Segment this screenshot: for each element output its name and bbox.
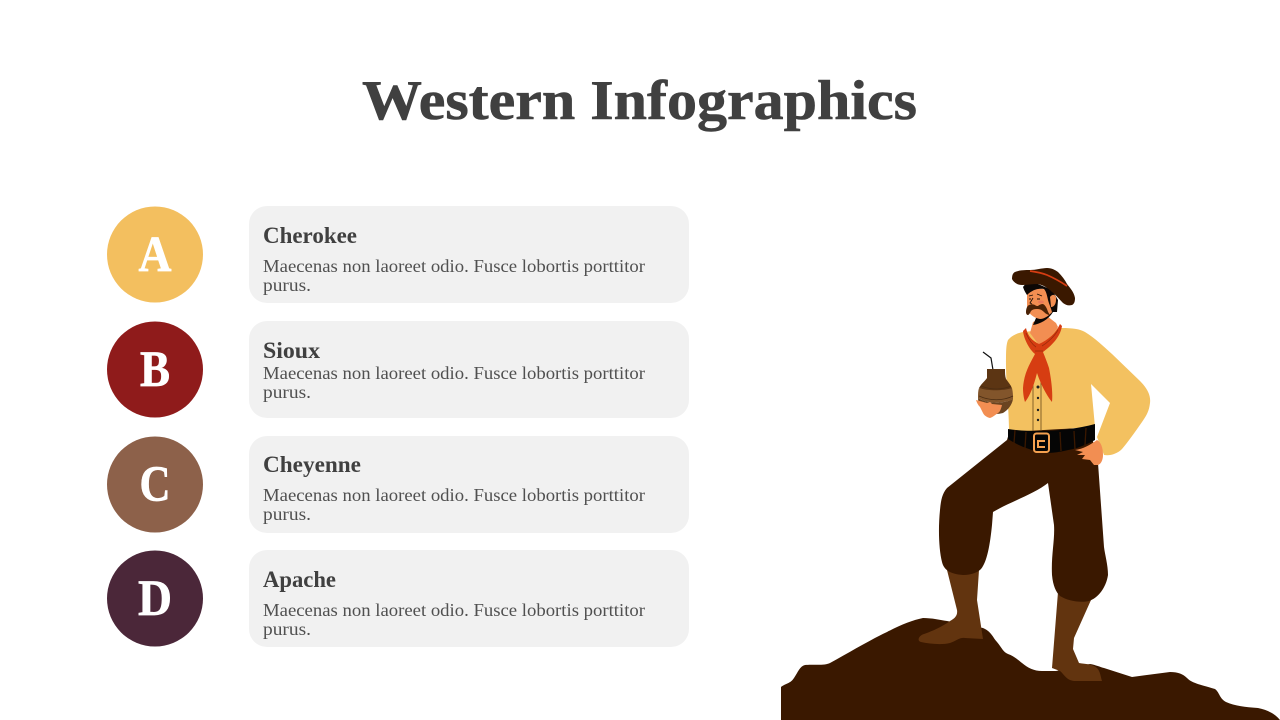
card: Cherokee: Cherokee bbox=[263, 223, 357, 248]
belt bbox=[1008, 424, 1095, 453]
badge: C bbox=[107, 436, 203, 532]
badge: A bbox=[107, 206, 203, 302]
card: Apache bbox=[249, 550, 689, 647]
card: Cheyenne: Cheyenne bbox=[263, 452, 361, 477]
ear bbox=[1050, 295, 1056, 307]
card: Cheyenne: Maecenas non laoreet odio. Fusce lobortis porttitor bbox=[263, 485, 645, 505]
row: Cheyenne bbox=[107, 436, 689, 533]
hat bbox=[1012, 268, 1075, 305]
card: Sioux bbox=[249, 321, 689, 418]
row: Apache bbox=[107, 550, 689, 647]
card: Sioux: purus. bbox=[263, 382, 311, 402]
facial features bbox=[1029, 294, 1042, 304]
card: Cherokee: Maecenas non laoreet odio. Fusce lobortis porttitor bbox=[263, 256, 645, 276]
title: Western Infographics bbox=[362, 70, 917, 132]
cheek blush bbox=[1038, 300, 1044, 304]
badge: D bbox=[107, 550, 203, 646]
card: Sioux: Maecenas non laoreet odio. Fusce lobortis porttitor bbox=[263, 363, 645, 383]
hair bbox=[1023, 281, 1058, 312]
card: Cheyenne bbox=[249, 436, 689, 533]
badge: D: D bbox=[138, 571, 172, 627]
neck and chest bbox=[1030, 316, 1058, 345]
row: Cherokee bbox=[107, 206, 689, 303]
card: Sioux: Sioux bbox=[263, 338, 321, 363]
shirt placket and buttons bbox=[1033, 368, 1041, 432]
badge: C: C bbox=[140, 457, 170, 513]
badge: A: A bbox=[138, 227, 172, 283]
shirt bbox=[1006, 328, 1150, 455]
card: Cherokee bbox=[249, 206, 689, 303]
red neckerchief bbox=[1023, 324, 1062, 402]
moustache bbox=[1026, 304, 1050, 315]
left boot bbox=[919, 570, 983, 644]
trousers bbox=[939, 428, 1108, 602]
card: Apache: purus. bbox=[263, 619, 311, 639]
neck shadow bbox=[1033, 312, 1053, 325]
mate gourd with straw bbox=[978, 352, 1013, 414]
badge: B bbox=[107, 322, 203, 418]
badge: B: B bbox=[140, 342, 170, 398]
face bbox=[1027, 289, 1053, 319]
left hand holding gourd bbox=[976, 400, 1002, 418]
right hand on hip bbox=[1075, 440, 1103, 465]
illustration: cowboy on a rock bbox=[781, 268, 1280, 720]
card: Cheyenne: purus. bbox=[263, 504, 311, 524]
right boot bbox=[1052, 592, 1102, 681]
card: Apache: Maecenas non laoreet odio. Fusce lobortis porttitor bbox=[263, 600, 645, 620]
rock ground bbox=[781, 618, 1280, 720]
card: Cherokee: purus. bbox=[263, 275, 311, 295]
card: Apache: Apache bbox=[263, 567, 336, 592]
row: Sioux bbox=[107, 321, 689, 418]
belt buckle bbox=[1034, 434, 1049, 452]
